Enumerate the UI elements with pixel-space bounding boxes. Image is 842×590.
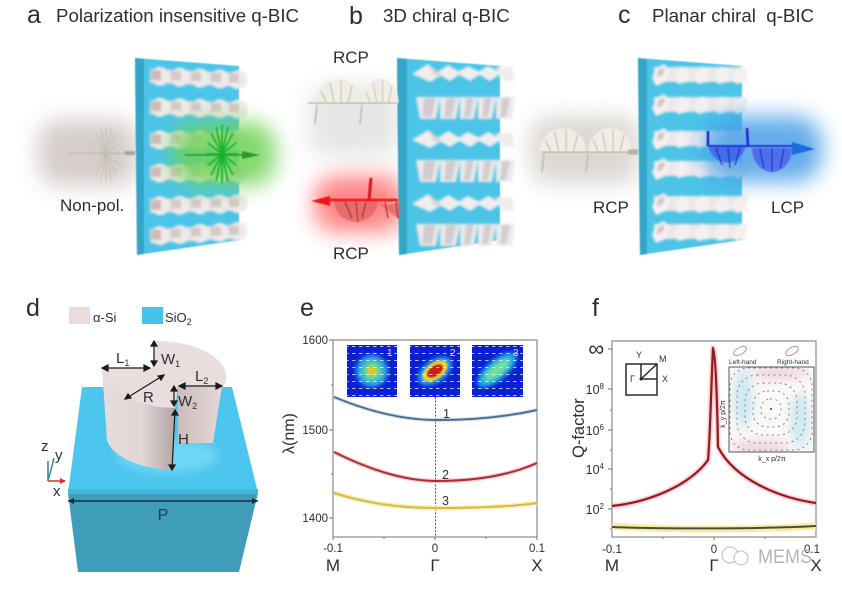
heading b (349, 2, 510, 30)
dimension labels: R (143, 389, 154, 406)
band numbers: 2 (442, 468, 449, 482)
panel e: dispersion chart (281, 294, 545, 575)
RCP incident wave (308, 79, 399, 124)
panel f: Q-factor chart (570, 294, 822, 575)
heading d: d (26, 294, 40, 322)
pillar array b (412, 64, 515, 246)
x axis tick labels (602, 544, 820, 556)
glow: blue emission (704, 116, 822, 182)
label: RCP top: RCP (333, 48, 369, 67)
label: RCP: RCP (593, 198, 629, 217)
polarization vector map inset (720, 366, 814, 463)
axis triad: x (53, 483, 61, 500)
legend: alpha-Si (69, 307, 117, 325)
polarization legend: Right-hand (777, 359, 809, 366)
x axis symmetry labels: Γ (430, 556, 440, 575)
x axis tick labels: -0.1 (323, 543, 343, 555)
field map 1: 1 (387, 348, 393, 359)
heading c: Planar chiral q-BIC (652, 5, 814, 26)
axis triad (41, 438, 66, 500)
heading a (27, 1, 299, 29)
field map 3 (472, 345, 523, 397)
heading e: e (300, 294, 314, 322)
heading b: 3D chiral q-BIC (383, 5, 510, 26)
Brillouin zone inset: M (659, 354, 666, 364)
polarization vector map inset: k_y p/2π (720, 400, 727, 428)
RCP incident wave c (540, 128, 638, 172)
legend: SiO2: SiO (165, 310, 187, 325)
polarization legend: Left-hand (729, 359, 757, 366)
x axis tick labels: -0.1 (602, 544, 622, 556)
polarization legend (729, 344, 809, 366)
field map 2 (410, 345, 460, 397)
field map 1 (347, 345, 397, 397)
y axis tick labels: 6 (600, 423, 605, 432)
y axis tick labels: 10 (586, 383, 600, 397)
dimension P (68, 498, 258, 524)
watermark (722, 547, 812, 568)
x axis tick labels: 0 (432, 543, 438, 555)
polarization vector map inset: k_x p/2π (758, 456, 786, 463)
glow: non-polarized input (38, 120, 138, 186)
yellow low-Q band (612, 526, 816, 529)
y axis tick labels: 1600 (302, 335, 328, 347)
RCP reflected red wave with arrow (311, 178, 400, 222)
dimension P: P (158, 507, 168, 524)
legend: SiO2: 2 (187, 317, 192, 327)
x axis symmetry labels: M (326, 556, 340, 575)
glow: RCP input (308, 85, 400, 157)
Gamma dashed line (434, 397, 436, 537)
panel b: 3D chiral q-BIC (308, 2, 515, 263)
glow: RCP incident (530, 116, 640, 184)
y axis tick labels: ∞ (588, 336, 604, 361)
field map 2: 2 (450, 348, 456, 359)
y axis tick labels: 4 (600, 462, 605, 471)
label: Non-pol.: Non-pol. (60, 196, 124, 215)
y axis tick labels: 10 (586, 424, 600, 438)
x axis symmetry labels (605, 556, 822, 575)
pillar array a (150, 66, 248, 246)
dimension labels (116, 350, 208, 448)
Brillouin zone inset: X (662, 374, 668, 384)
dimension arrows (102, 341, 222, 470)
x axis tick labels (323, 543, 545, 555)
x axis symmetry labels (326, 556, 543, 575)
x axis tick labels: 0.1 (529, 543, 545, 555)
heading a: a (27, 1, 41, 29)
x axis symmetry labels: X (531, 556, 543, 575)
y axis tick labels (302, 335, 328, 525)
dimension labels: W (178, 393, 192, 410)
plot frame (608, 341, 816, 540)
y axis title: λ(nm) (281, 413, 298, 454)
legend: alpha-Si: α-Si (93, 310, 117, 325)
dimension labels: H (178, 431, 189, 448)
Brillouin zone inset: Y (636, 350, 642, 360)
plot frame (329, 340, 537, 540)
heading b: b (349, 2, 363, 30)
x axis symmetry labels: M (605, 556, 619, 575)
input wave a (68, 126, 135, 182)
dimension labels: 2 (192, 401, 197, 411)
legend: SiO2 (142, 307, 192, 327)
axis triad: z (41, 438, 48, 455)
output wave a: green arrow (185, 125, 260, 183)
label: RCP bottom: RCP (333, 244, 369, 263)
metasurface slab a (135, 58, 239, 255)
heading c (618, 1, 814, 29)
band 3 (334, 493, 537, 508)
dimension labels: L (195, 368, 203, 385)
y axis tick labels (586, 336, 605, 517)
watermark: MEMS (758, 547, 812, 568)
x axis symmetry labels: X (810, 556, 822, 575)
pillar array c (652, 64, 748, 243)
band numbers (442, 407, 450, 508)
band numbers: 3 (442, 494, 449, 508)
heading c: c (618, 1, 630, 29)
label: LCP: LCP (771, 198, 804, 217)
dimension labels: 1 (124, 358, 129, 368)
dimension labels: W (161, 351, 175, 368)
band 1 (334, 397, 537, 420)
metasurface slab b (397, 58, 500, 255)
x axis tick labels: 0 (711, 544, 717, 556)
cylinder with notches (102, 341, 226, 472)
y axis tick labels: 1400 (302, 513, 328, 525)
metasurface slab c (638, 58, 742, 255)
dimension labels: L (116, 350, 124, 367)
glow: green emission (172, 122, 276, 186)
axis triad: y (55, 447, 63, 464)
y axis tick labels: 8 (600, 382, 605, 391)
y axis tick labels: 10 (586, 503, 600, 517)
panel c: planar chiral q-BIC (530, 1, 822, 255)
Brillouin zone inset (626, 350, 668, 395)
heading f: f (592, 294, 599, 322)
red Q-factor curve (612, 348, 816, 506)
heading a: Polarization insensitive q-BIC (56, 5, 299, 26)
band numbers: 1 (443, 407, 450, 421)
band 2 (334, 452, 537, 481)
y axis title: Q-factor (570, 398, 588, 458)
y axis tick labels: 10 (586, 463, 600, 477)
dimension labels: 1 (175, 359, 180, 369)
y axis tick labels: 1500 (302, 425, 328, 437)
field map 3: 3 (513, 348, 519, 359)
Brillouin zone inset: Γ (630, 374, 635, 384)
glow: red reflected (314, 176, 404, 232)
dimension labels: 2 (203, 376, 208, 386)
y axis tick labels: 2 (600, 502, 605, 511)
box substrate (68, 387, 258, 572)
x axis tick labels: 0.1 (804, 544, 820, 556)
x axis symmetry labels: Γ (709, 556, 719, 575)
panel d: unit cell schematic (26, 294, 258, 572)
panel a: polarization insensitive q-BIC (27, 1, 299, 255)
LCP output blue wave with arrow (708, 128, 815, 172)
